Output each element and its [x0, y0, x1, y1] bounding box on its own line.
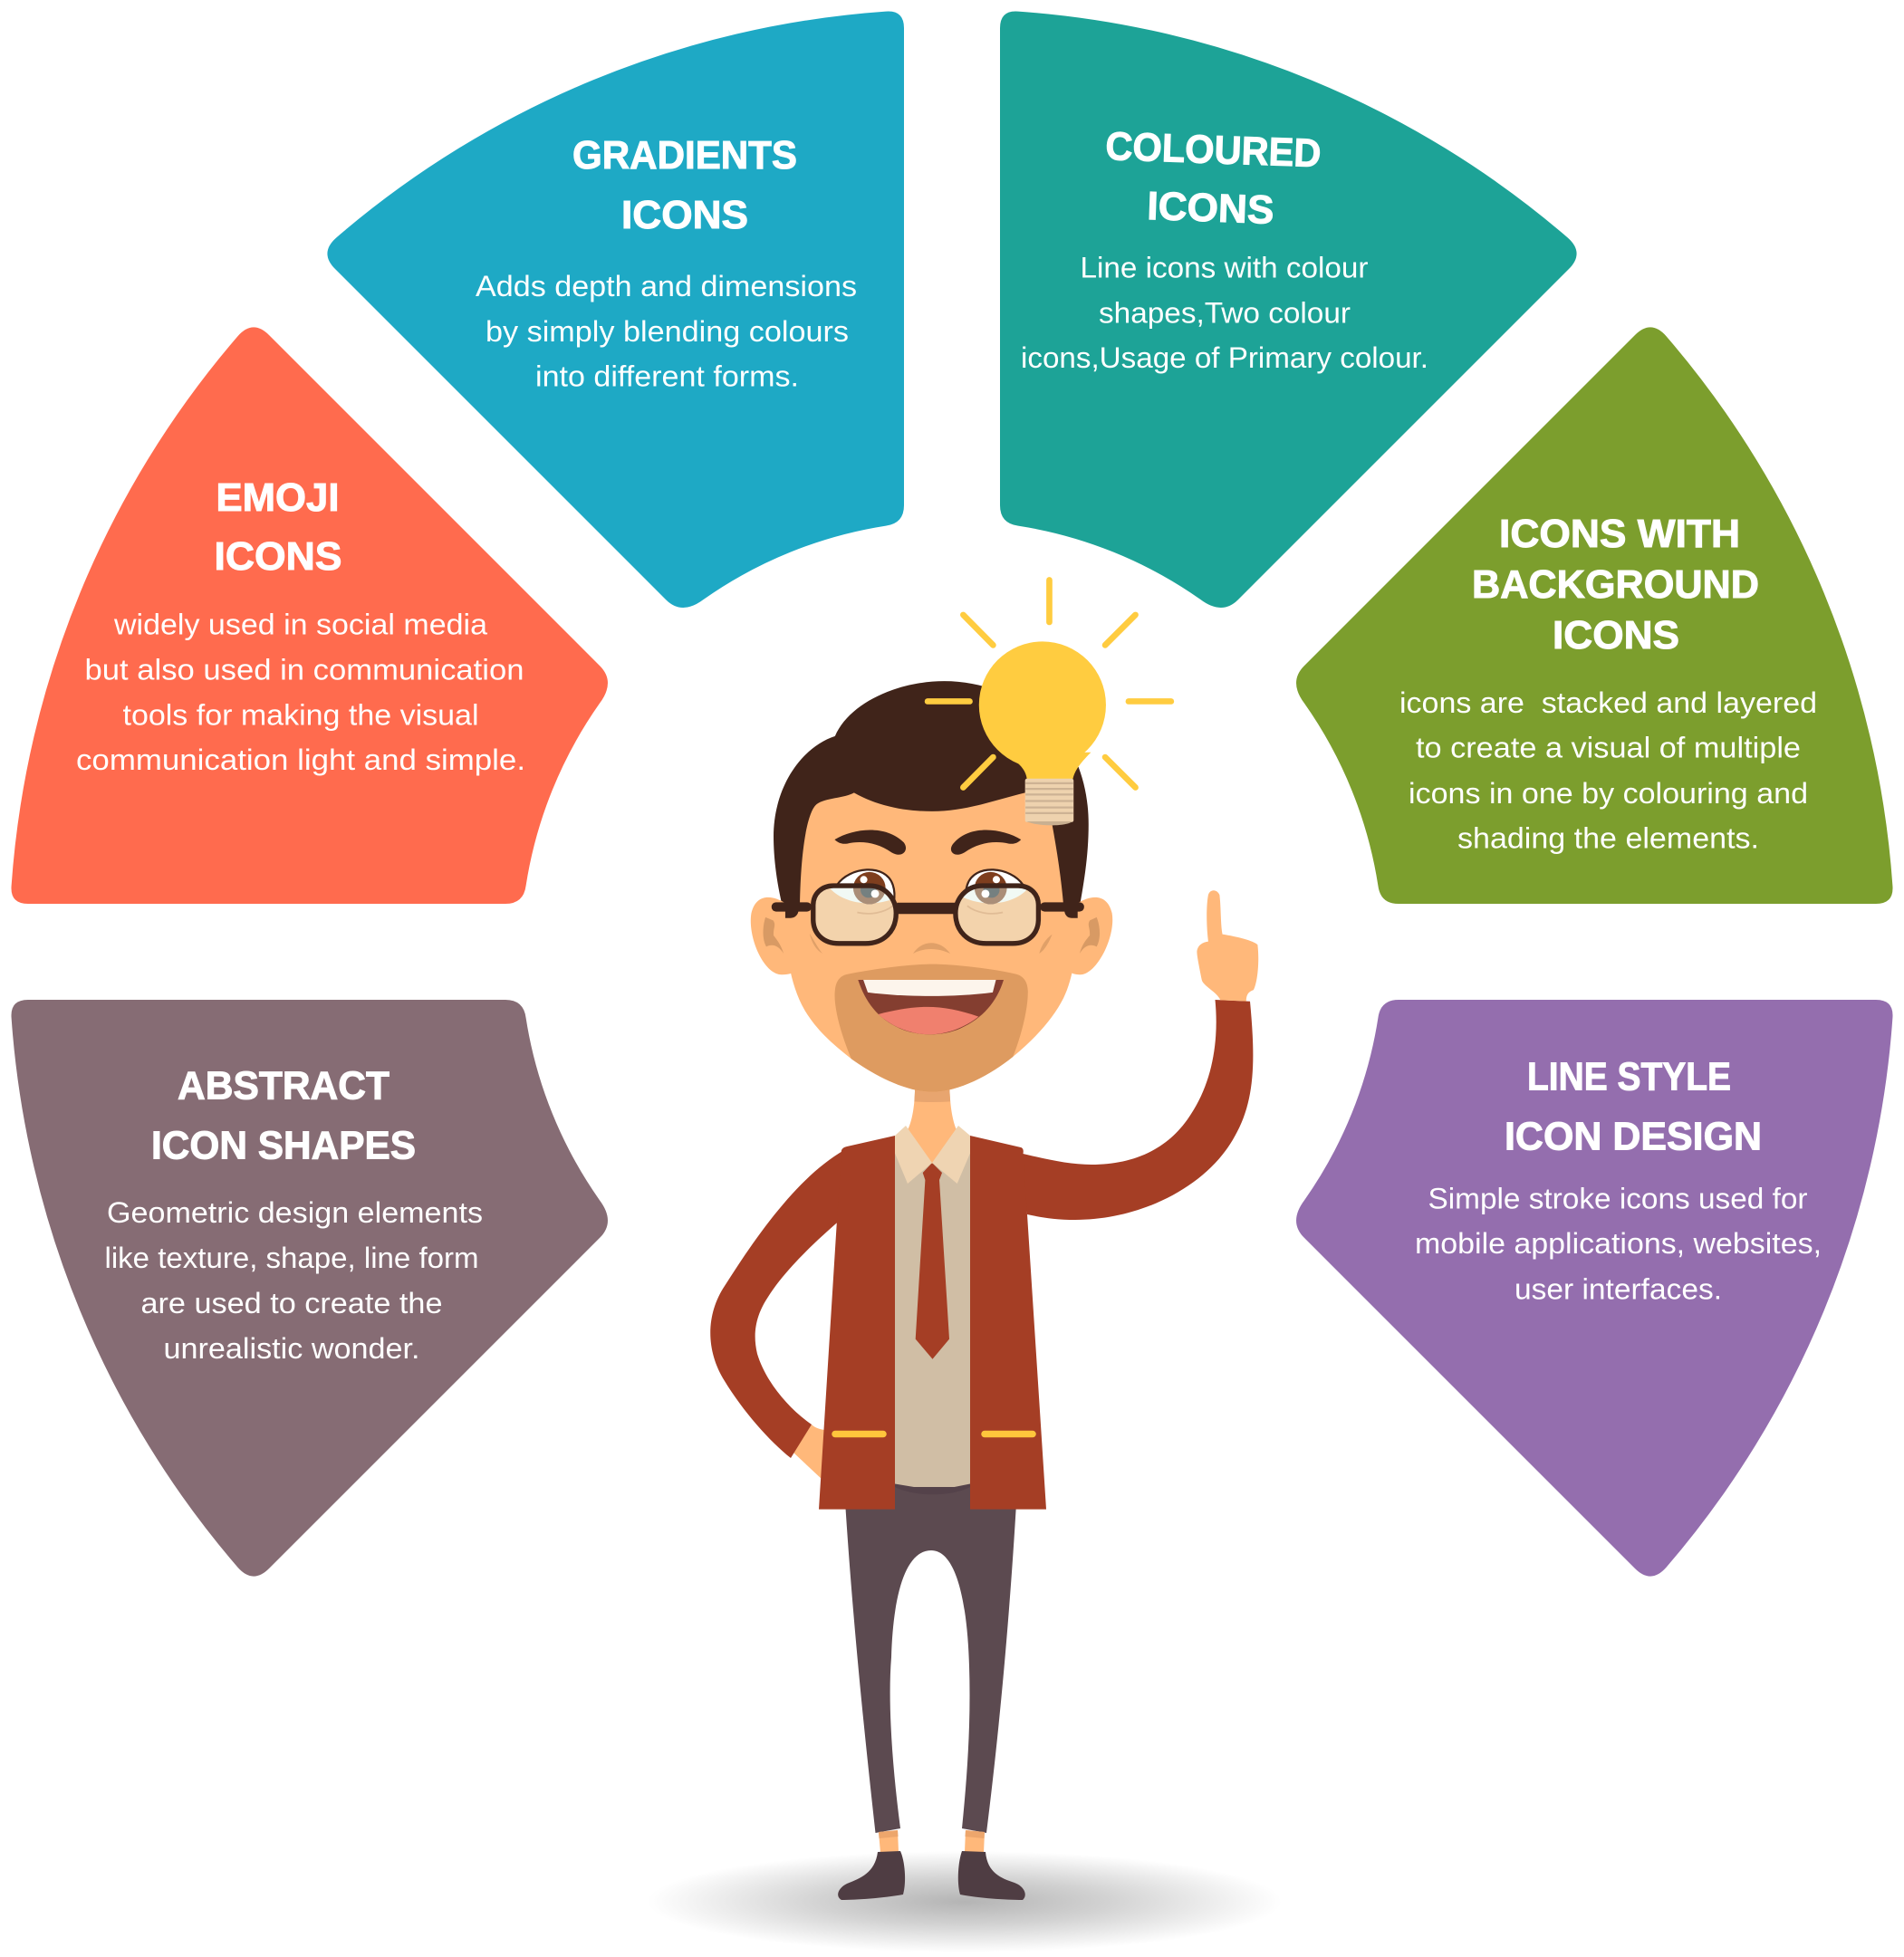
legs: trousers	[843, 1472, 1018, 1833]
heading: icons with background icons	[1472, 512, 1759, 657]
mouth	[858, 980, 1004, 1034]
jacket pockets	[835, 1431, 1033, 1437]
text: gradients description: into different forms.	[535, 360, 799, 393]
text: background description: icons are stacked and layered	[1399, 686, 1817, 719]
eyebrows	[834, 830, 1021, 855]
text: background description: shading the elements.	[1457, 822, 1759, 855]
jacket	[819, 1136, 1046, 1510]
icon: bulb rays	[928, 580, 1171, 788]
heading: gradients icons	[572, 133, 797, 237]
nose and cheek lines	[810, 934, 1053, 954]
ankles	[879, 1830, 985, 1853]
heading: line style icon design: ICON DESIGN	[1505, 1114, 1762, 1159]
text: emoji description: communication light and simple.	[76, 743, 525, 776]
text: coloured description: Line icons with colour	[1080, 252, 1369, 284]
raised arm sleeve	[1019, 1000, 1253, 1220]
raised hand pointing	[1197, 890, 1258, 1002]
eyes	[837, 869, 1023, 905]
text: abstract description: unrealistic wonder.	[163, 1332, 420, 1365]
hand on hip	[793, 1425, 824, 1480]
text: gradients description: Adds depth and dimensions	[476, 270, 857, 302]
text: abstract description: Geometric design elements	[107, 1196, 483, 1229]
text: abstract description: are used to create the	[141, 1287, 442, 1319]
hair	[774, 681, 1089, 917]
heading: coloured icons: ICONS	[1147, 184, 1274, 233]
text: coloured description	[1021, 252, 1428, 374]
panel: gradients icons	[327, 11, 904, 608]
shoes	[838, 1851, 1025, 1900]
bent arm sleeve	[710, 1150, 844, 1458]
glasses frame	[772, 886, 1084, 944]
panel: icons with background	[1296, 327, 1893, 904]
character: man with glasses	[710, 580, 1258, 1900]
heading: coloured icons: COLOURED	[1105, 124, 1322, 176]
icon: light bulb	[979, 641, 1106, 825]
neck	[908, 1087, 957, 1164]
heading: gradients icons: GRADIENTS	[572, 133, 797, 177]
heading: icons with background icons: ICONS WITH	[1499, 512, 1740, 556]
text: gradients description	[476, 270, 857, 393]
ears	[751, 897, 1112, 974]
text: emoji description: tools for making the visual	[123, 698, 478, 731]
shirt collar	[895, 1126, 970, 1184]
text: emoji description: widely used in social media	[113, 608, 487, 640]
heading: icons with background icons: BACKGROUND	[1472, 562, 1759, 607]
text: line style description: user interfaces.	[1515, 1273, 1722, 1306]
text: gradients description: by simply blending colours	[486, 315, 849, 348]
necktie	[916, 1163, 949, 1359]
heading: emoji icons: ICONS	[214, 534, 342, 579]
heading: icons with background icons: ICONS	[1553, 613, 1679, 657]
heading: abstract icon shapes	[151, 1064, 416, 1168]
glasses lenses with tinted eyes	[815, 887, 1036, 942]
heading: abstract icon shapes: ICON SHAPES	[151, 1124, 416, 1168]
heading: line style icon design: LINE STYLE	[1527, 1054, 1731, 1098]
text: line style description: Simple stroke icons used for	[1428, 1183, 1808, 1215]
heading: abstract icon shapes: ABSTRACT	[178, 1064, 389, 1108]
text: line style description: mobile applications, websites,	[1415, 1227, 1822, 1260]
text: background description: icons in one by colouring and	[1409, 777, 1808, 810]
text: abstract description: like texture, shape, line form	[105, 1242, 478, 1274]
heading: gradients icons: ICONS	[621, 193, 748, 237]
heading: coloured icons	[1105, 124, 1322, 233]
text: line style description	[1415, 1183, 1822, 1306]
panel: emoji icons	[11, 327, 608, 904]
shirt	[895, 1136, 970, 1494]
heading: emoji icons	[214, 475, 342, 579]
panel: coloured icons	[1000, 11, 1577, 608]
text: emoji description: but also used in communication	[85, 653, 524, 686]
face	[785, 792, 1078, 1092]
head	[751, 580, 1171, 1164]
text: background description: to create a visual of multiple	[1416, 732, 1801, 764]
text: emoji description	[76, 608, 525, 776]
panel: line style icon design	[1296, 1000, 1893, 1577]
text: background description	[1399, 686, 1817, 855]
panel: abstract icon shapes	[11, 1000, 608, 1577]
text: coloured description: shapes,Two colour	[1099, 296, 1351, 329]
heading: line style icon design	[1505, 1054, 1762, 1159]
text: coloured description: icons,Usage of Primary colour.	[1021, 341, 1428, 374]
heading: emoji icons: EMOJI	[216, 475, 339, 520]
text: abstract description	[105, 1196, 483, 1365]
ground shadow	[648, 1851, 1282, 1952]
beard	[835, 964, 1028, 1092]
